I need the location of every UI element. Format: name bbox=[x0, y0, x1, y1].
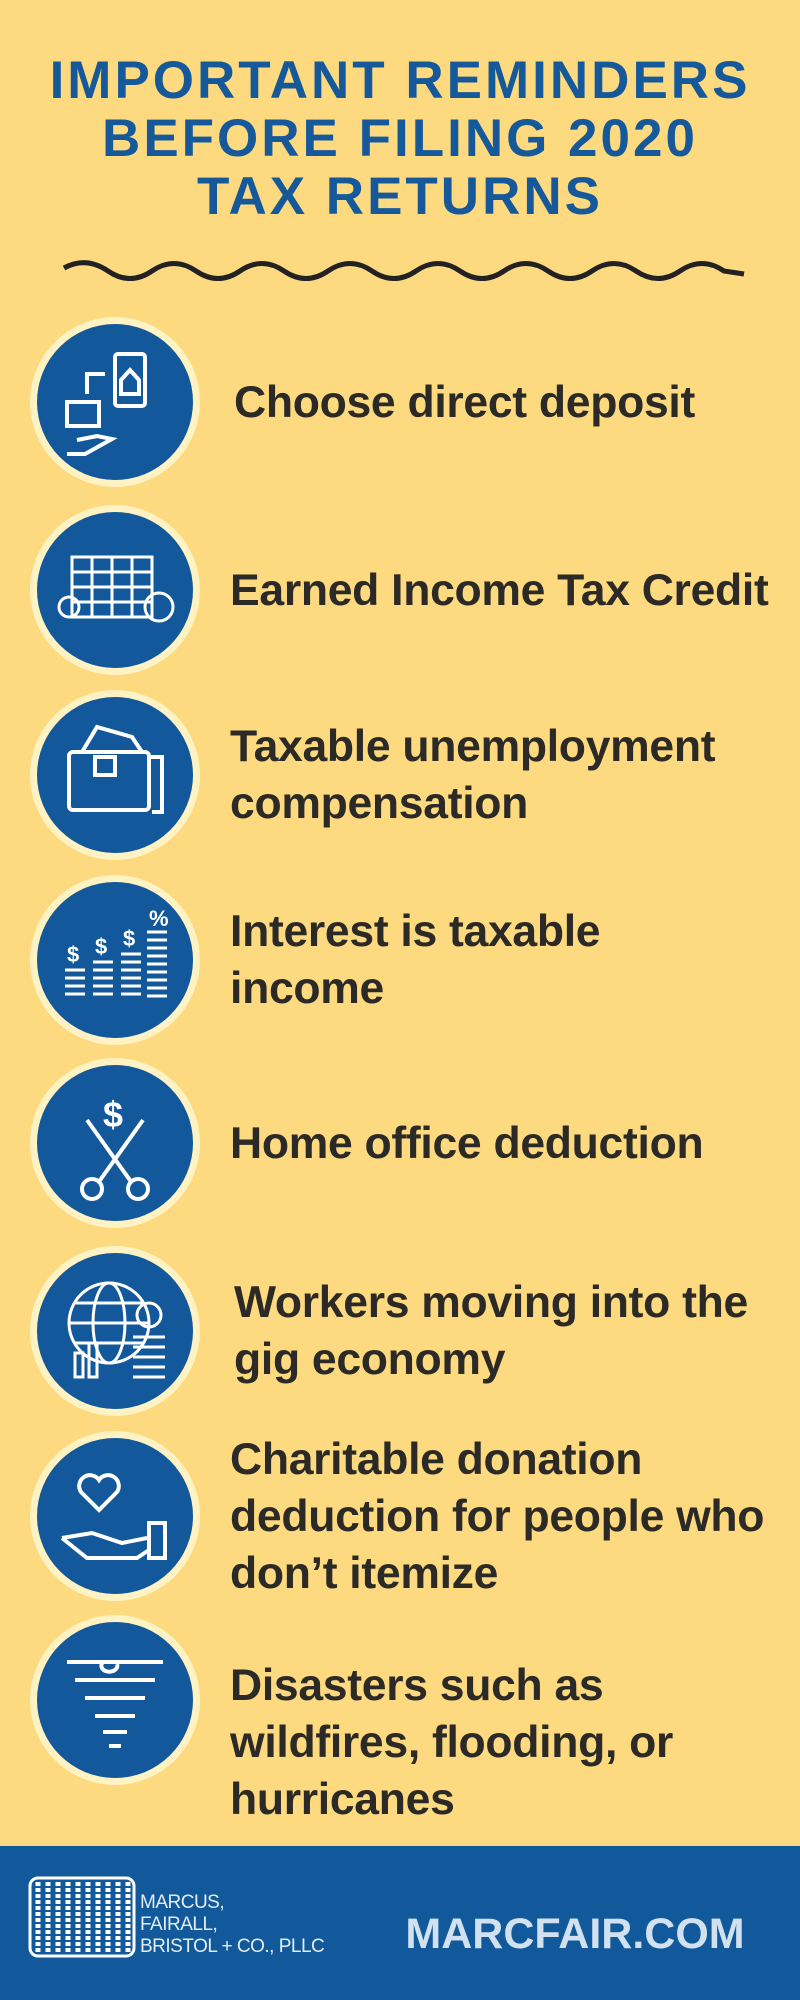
icon: globe and coins bbox=[30, 1246, 200, 1416]
item: home office bbox=[30, 1058, 703, 1228]
text: Taxable unemployment bbox=[230, 722, 715, 771]
text: income bbox=[230, 964, 384, 1013]
icon: tornado bbox=[30, 1615, 200, 1785]
icon: coins stacks: % bbox=[149, 906, 169, 931]
text: hurricanes bbox=[230, 1774, 455, 1824]
logo: FAIRALL, bbox=[140, 1914, 217, 1935]
text: Home office deduction bbox=[230, 1118, 703, 1168]
footer bbox=[0, 1846, 800, 2000]
icon: scissors bbox=[30, 1058, 200, 1228]
item: EITC bbox=[30, 505, 768, 675]
item: unemployment bbox=[30, 690, 716, 860]
icon: coins stacks: $ bbox=[95, 934, 107, 959]
item: gig economy bbox=[30, 1246, 748, 1416]
logo: BRISTOL + CO., PLLC bbox=[140, 1936, 324, 1957]
text bbox=[234, 1278, 748, 1384]
logo: MARCUS, bbox=[140, 1892, 224, 1913]
text: deduction for people who bbox=[230, 1492, 764, 1540]
text bbox=[230, 722, 716, 828]
icon: coins stacks: $ bbox=[67, 942, 79, 967]
icon: coins stacks bbox=[30, 875, 200, 1045]
text bbox=[230, 907, 600, 1013]
title bbox=[50, 51, 750, 226]
text: compensation bbox=[230, 779, 528, 828]
text: Disasters such as bbox=[230, 1660, 603, 1710]
item: charitable bbox=[30, 1431, 764, 1601]
text bbox=[230, 1434, 764, 1598]
logo bbox=[28, 1876, 324, 1958]
icon: calendar bbox=[30, 505, 200, 675]
text: Workers moving into the bbox=[234, 1278, 748, 1327]
website: MARCFAIR.COM bbox=[405, 1910, 745, 1958]
item: interest bbox=[30, 875, 600, 1045]
icon: scissors: $ bbox=[103, 1094, 123, 1135]
text: Interest is taxable bbox=[230, 907, 600, 956]
title: TAX RETURNS bbox=[197, 167, 603, 226]
text: Choose direct deposit bbox=[234, 378, 695, 426]
text: Charitable donation bbox=[230, 1434, 642, 1484]
icon: coins stacks: $ bbox=[123, 926, 135, 951]
text: Earned Income Tax Credit bbox=[230, 566, 768, 614]
item: disasters bbox=[30, 1615, 673, 1824]
item: direct deposit bbox=[30, 317, 695, 487]
icon: phone and money bbox=[30, 317, 200, 487]
title: IMPORTANT REMINDERS bbox=[50, 51, 750, 110]
text bbox=[230, 1660, 673, 1824]
icon: heart in hand bbox=[30, 1431, 200, 1601]
icon: wallet bbox=[30, 690, 200, 860]
text: gig economy bbox=[234, 1335, 505, 1384]
title: BEFORE FILING 2020 bbox=[102, 109, 698, 168]
text: don’t itemize bbox=[230, 1548, 498, 1598]
text: wildfires, flooding, or bbox=[230, 1718, 673, 1766]
